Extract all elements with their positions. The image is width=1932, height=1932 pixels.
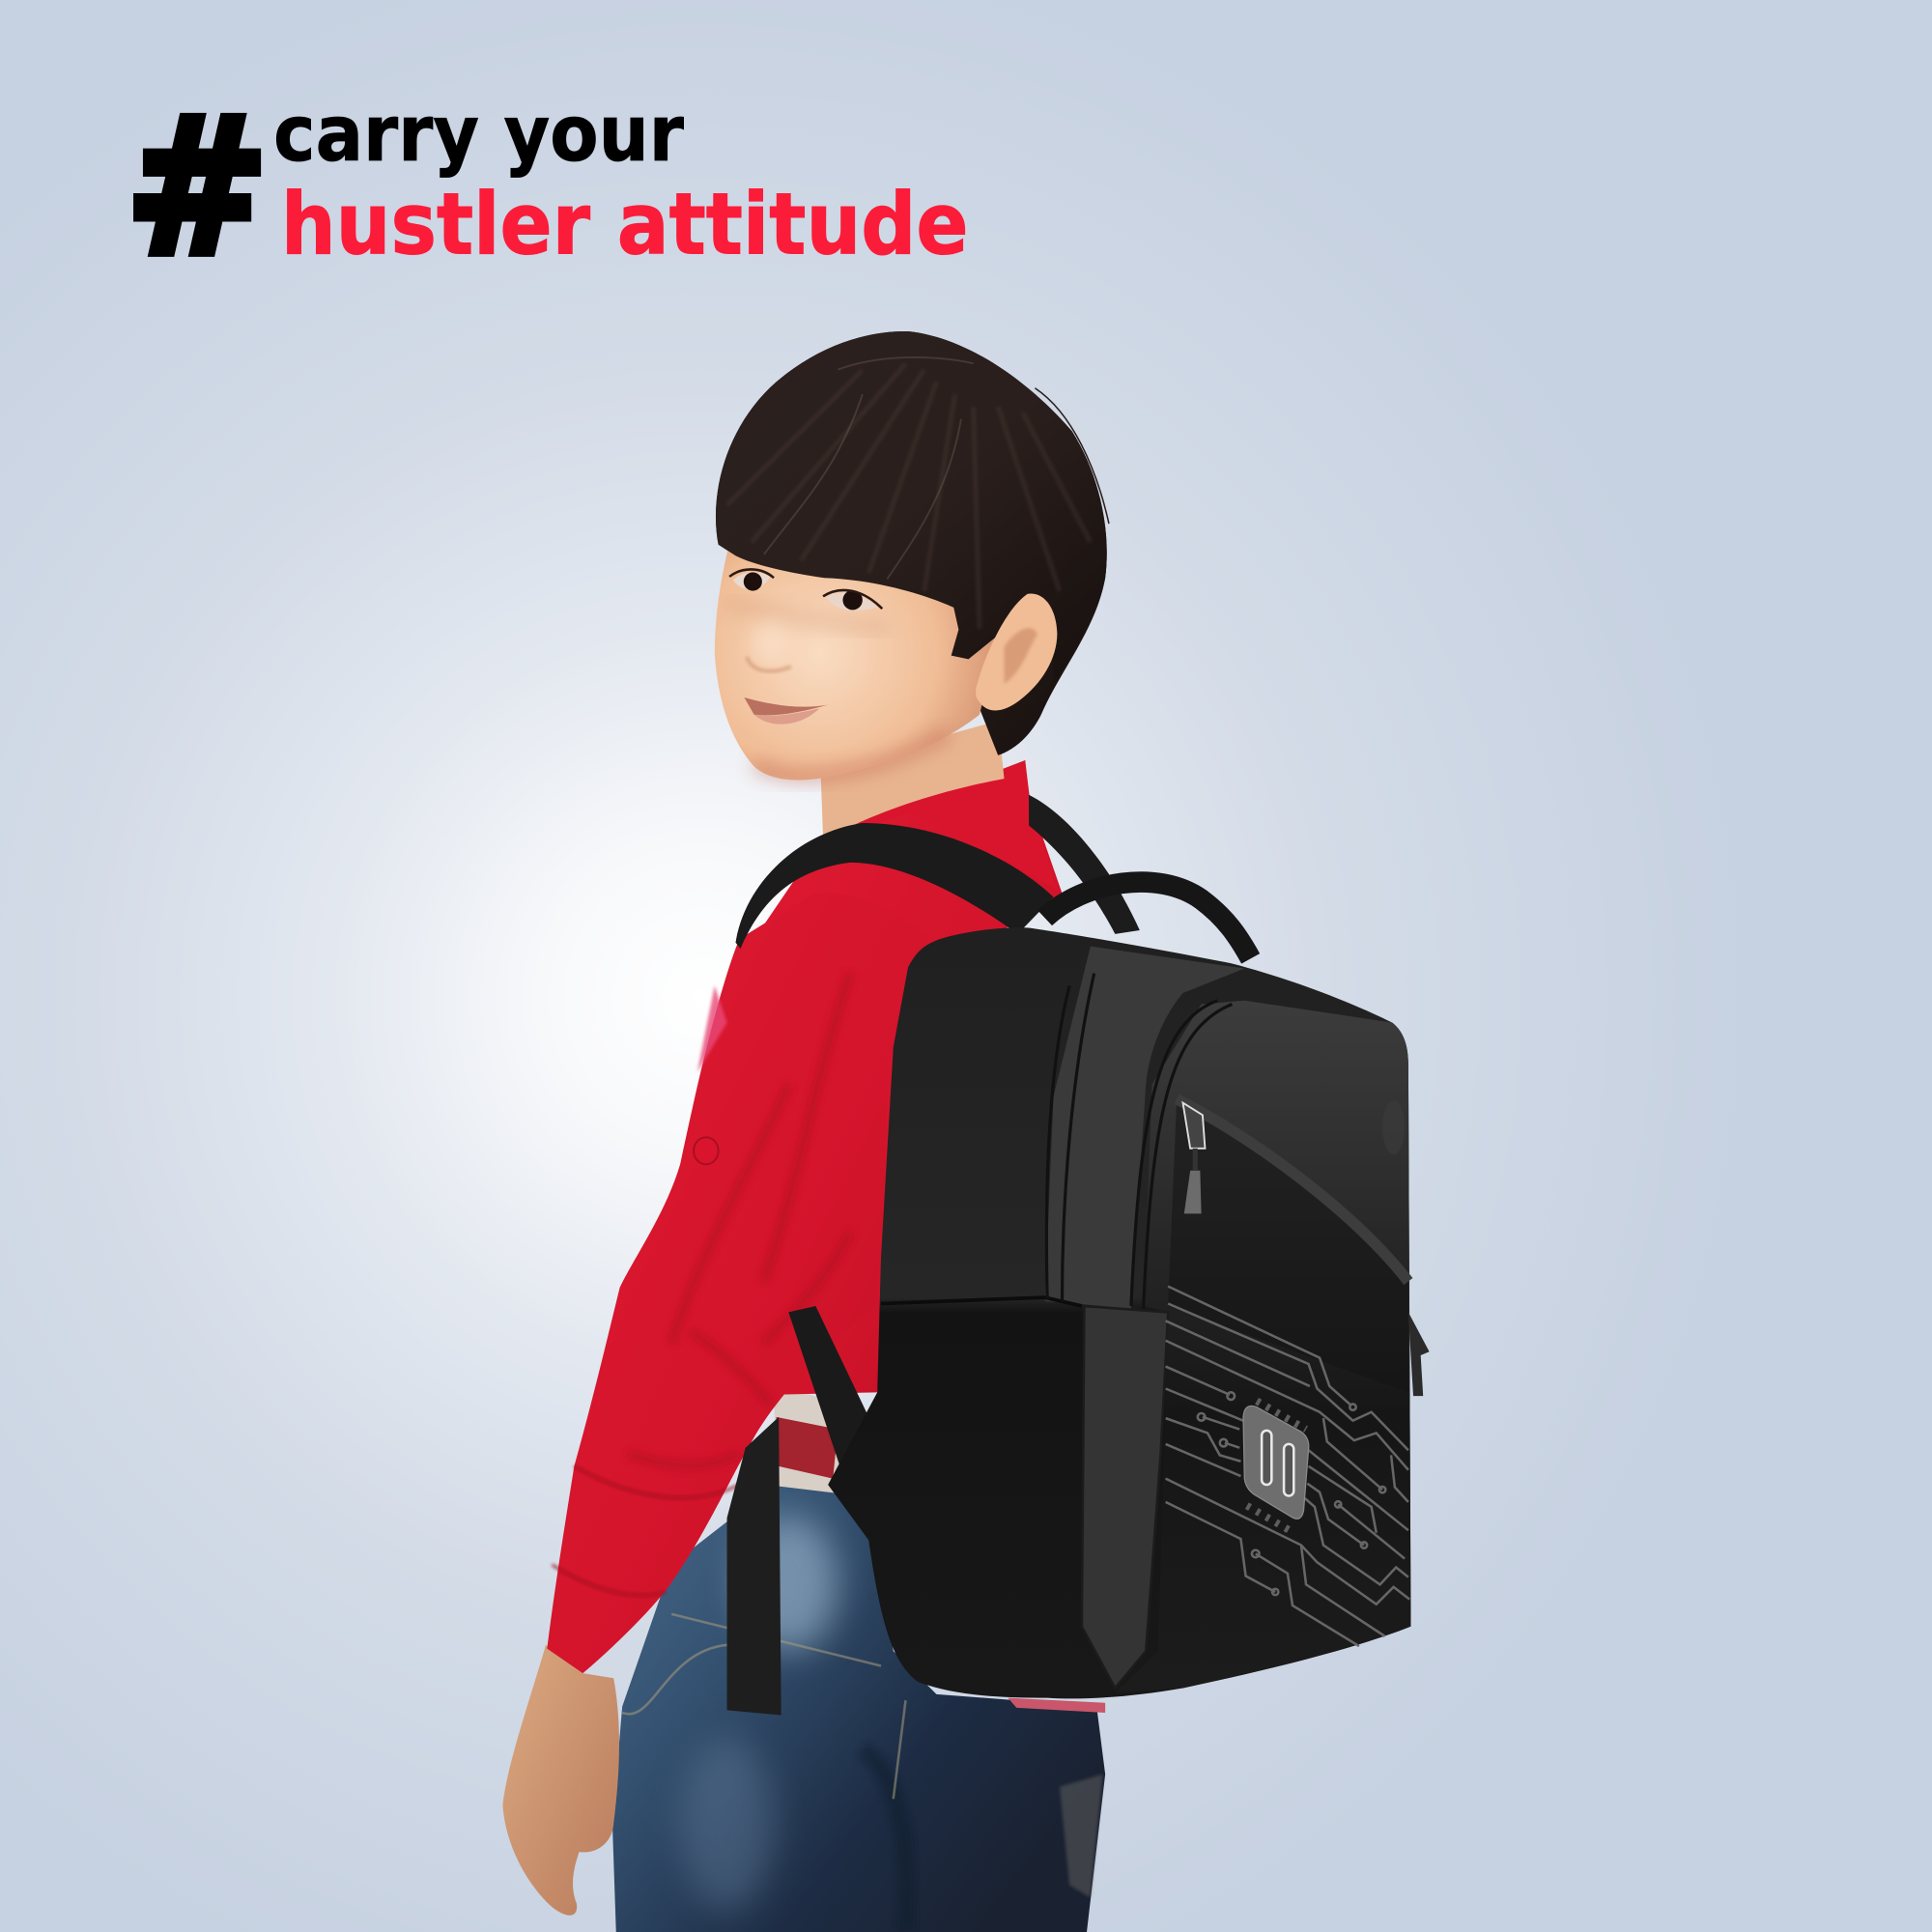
far shoulder strap	[1029, 795, 1140, 934]
lower side seam	[881, 1297, 1082, 1306]
jeans	[612, 1472, 1105, 1932]
lower lip	[754, 708, 819, 724]
headline	[126, 78, 969, 298]
pocket zipper	[1177, 1099, 1408, 1282]
cheek and chin shade	[754, 733, 949, 775]
mid gusset panel	[1045, 947, 1244, 1309]
shirt torso	[727, 760, 1062, 1395]
zipper seams	[1046, 974, 1233, 1309]
zipper puller	[1182, 1103, 1205, 1213]
nose highlight	[752, 622, 788, 665]
neck	[820, 721, 1005, 838]
backpack silhouette	[828, 927, 1410, 1698]
face	[715, 542, 1001, 780]
chip badge	[1243, 1401, 1309, 1533]
boy with backpack	[502, 331, 1430, 1932]
shirt hem below backpack	[1008, 1698, 1105, 1713]
belt pattern	[777, 1417, 838, 1479]
inner ear	[1005, 628, 1037, 684]
mesh side pocket	[1082, 1306, 1168, 1688]
hair back	[716, 331, 1107, 755]
side puller	[1408, 1312, 1430, 1396]
collar	[838, 760, 1057, 890]
headline line one: carry your	[273, 88, 684, 179]
shirt button	[694, 1137, 719, 1164]
eye socket shade	[727, 604, 887, 629]
left eye	[729, 569, 774, 591]
circuit pattern	[1166, 1287, 1409, 1646]
belt and waist	[774, 1386, 853, 1493]
shirt sleeve	[547, 893, 930, 1673]
carry handle	[1045, 882, 1251, 958]
brand mark	[1382, 1100, 1405, 1154]
hair fringe	[716, 331, 1109, 684]
hand	[502, 1645, 619, 1916]
lower pocket shade	[1168, 1099, 1408, 1392]
right eye	[823, 590, 882, 611]
headline line two: hustler attitude	[281, 175, 969, 274]
near shoulder strap	[735, 823, 1054, 949]
hash symbol: #	[126, 78, 269, 298]
mouth	[744, 697, 828, 715]
nose shadow	[747, 657, 791, 671]
ear	[976, 593, 1057, 710]
hanging strap	[727, 1306, 868, 1716]
front panel	[1115, 1001, 1410, 1693]
backpack	[828, 927, 1430, 1698]
